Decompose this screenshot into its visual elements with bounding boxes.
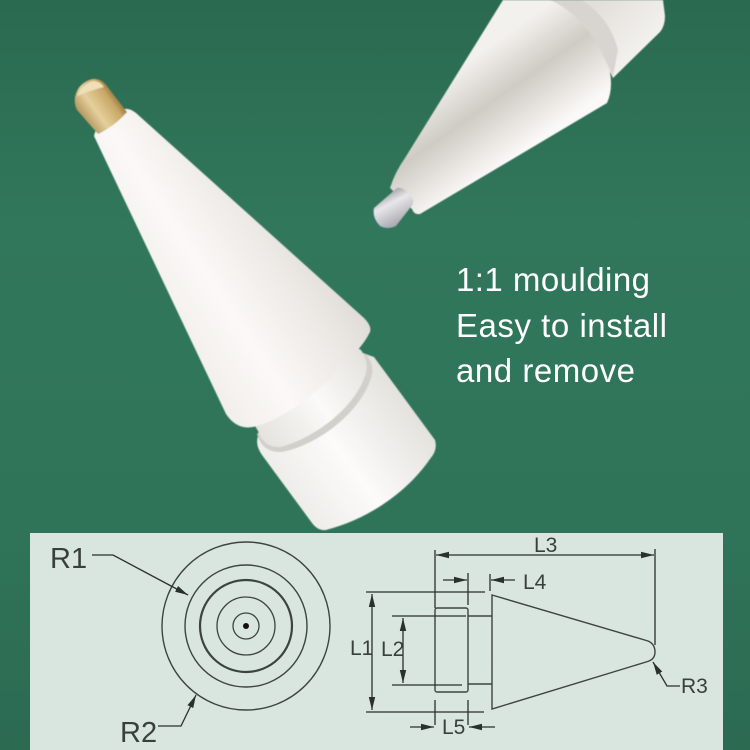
nib collar bbox=[257, 352, 436, 530]
label R3: R3 bbox=[681, 675, 708, 698]
dimension L2: L2 bbox=[381, 638, 404, 661]
feature text bbox=[456, 261, 667, 389]
collar rim shadow bbox=[257, 350, 372, 452]
small nib cone bbox=[390, 0, 611, 214]
dimension L3: L3 bbox=[534, 534, 557, 557]
label R1: R1 bbox=[50, 543, 87, 575]
small nib collar bbox=[575, 0, 665, 78]
nib cone bbox=[94, 109, 370, 427]
dimension L5 bbox=[410, 700, 495, 739]
label R2: R2 bbox=[120, 717, 157, 749]
nib neck bbox=[254, 345, 367, 447]
large pen nib bbox=[75, 79, 436, 530]
dimension L2 bbox=[381, 616, 466, 685]
label R3 bbox=[653, 662, 708, 698]
small pen nib bbox=[374, 0, 665, 228]
feature text: and remove bbox=[456, 352, 635, 389]
label R1 bbox=[50, 543, 188, 595]
dimension L4: L4 bbox=[523, 571, 547, 594]
feature text: Easy to install bbox=[456, 307, 667, 344]
dimension L1: L1 bbox=[350, 637, 373, 660]
label R2 bbox=[120, 695, 196, 749]
side view drawing bbox=[435, 595, 655, 709]
dimension L5: L5 bbox=[442, 716, 465, 739]
gold tip bbox=[75, 79, 127, 134]
silver tip bbox=[374, 188, 413, 228]
dimension L4 bbox=[443, 571, 547, 605]
end view circles bbox=[162, 542, 330, 710]
panel: technical diagram bbox=[30, 533, 723, 750]
feature text: 1:1 moulding bbox=[456, 261, 650, 298]
dimension L1 bbox=[350, 592, 485, 712]
dimension L3 bbox=[435, 534, 655, 645]
small nib ring bbox=[550, 0, 618, 76]
